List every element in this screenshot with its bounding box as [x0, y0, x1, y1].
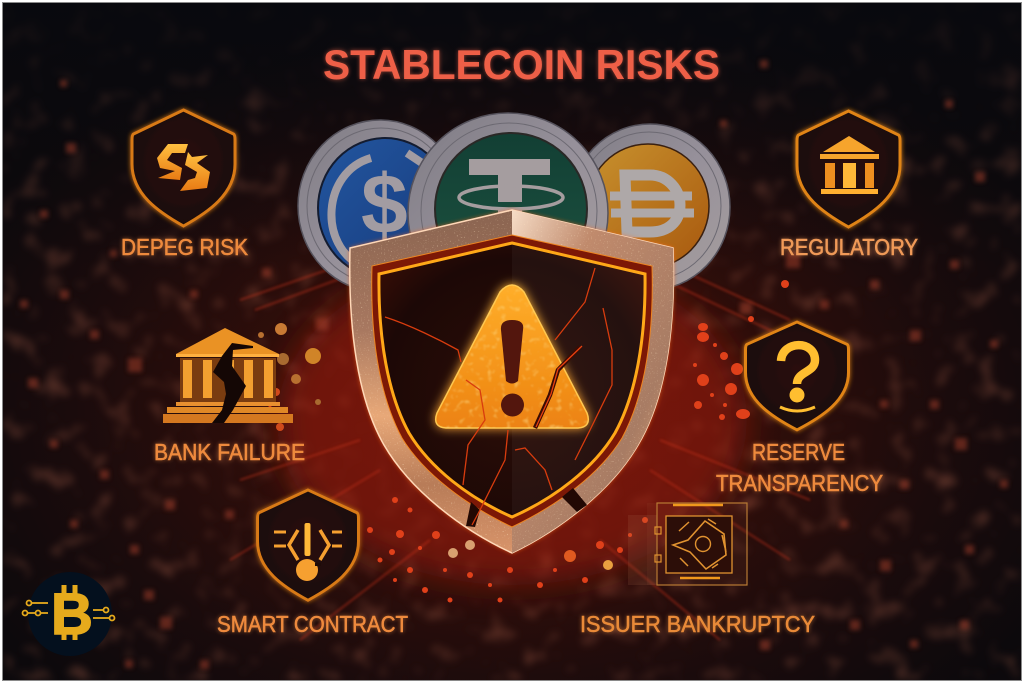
icon: regulatory shield: [797, 111, 900, 227]
label: regulatory: REGULATORY: [780, 234, 918, 260]
central red glow and rays: [230, 255, 810, 640]
ember particles: [258, 280, 789, 602]
title: STABLECOIN RISKS: [323, 41, 720, 88]
logo: bitcoin badge: [22, 572, 114, 656]
label: reserve transparency: TRANSPARENCY: [716, 470, 883, 496]
label: reserve transparency: [716, 439, 883, 496]
icon: reserve transparency shield: [746, 322, 848, 430]
logo: bitcoin badge: B: [51, 582, 93, 647]
icon: issuer safe: [628, 503, 747, 585]
icon: depeg risk shield: [132, 110, 235, 226]
label: smart contract: SMART CONTRACT: [217, 611, 408, 637]
label: depeg risk: DEPEG RISK: [121, 234, 249, 260]
coin: USDC: [298, 120, 462, 292]
label: bank failure: BANK FAILURE: [154, 439, 305, 465]
warning triangle: [430, 280, 595, 430]
label: reserve transparency: RESERVE: [752, 439, 845, 465]
shield metal rim: [345, 205, 680, 557]
coin: DAI: [570, 124, 730, 290]
label: issuer bankruptcy: ISSUER BANKRUPTCY: [580, 611, 815, 637]
icon: failing bank: [163, 328, 293, 423]
coin: USDC: $: [361, 157, 408, 251]
shield rim break: [466, 488, 587, 527]
coin: Tether: [408, 113, 608, 313]
shield inner dark face: [372, 235, 652, 527]
triangle crack: [535, 346, 582, 428]
central shield: [345, 205, 680, 557]
shield cracks: [385, 268, 612, 525]
icon: smart contract shield: [258, 490, 358, 600]
